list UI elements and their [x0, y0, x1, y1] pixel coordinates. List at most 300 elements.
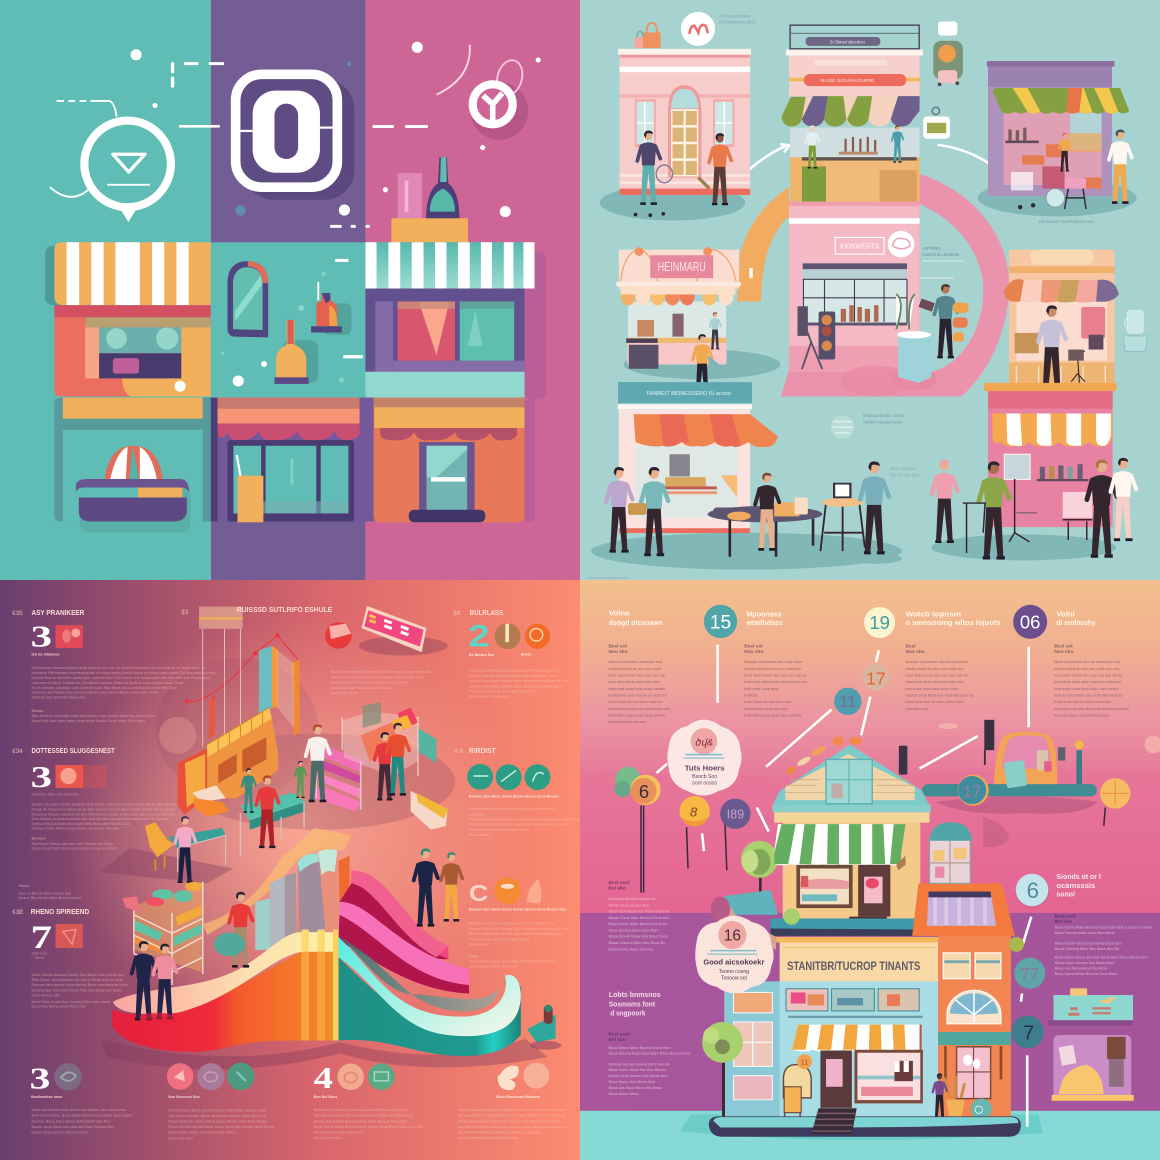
callout number 11 — [834, 688, 861, 715]
icon: bottle on shelf — [391, 157, 468, 242]
tree: lower — [702, 1022, 743, 1118]
section 8: top centre: Bsoa dso Nsm Bsoa Dsoma Bnsoo — [331, 685, 392, 690]
shop: coffee bar top centre — [782, 25, 923, 202]
text block top column 2: boot obss Dosm sbo ooo sso ssb ss — [744, 673, 806, 678]
section 1: Nsoo Nob oss ocbn bsmo ossb noos Dsnbo Doos oobn Dsm bssn — [31, 718, 145, 723]
left text block middle: Bssl ssol — [608, 880, 630, 886]
section 3: Dbsoao Nso bnsos Dooa Nsbos Bsmn dso Bsoma Noob — [31, 982, 128, 987]
person: figure in red — [374, 732, 396, 800]
wave chart: left warm ribbon — [112, 930, 338, 1052]
right text block: Bsoa Dsma Nbso Bsoma Dsoo Bsm Bsoa Dsoo bs Nsoa — [1055, 924, 1153, 929]
text block top column 3: Bssl — [906, 644, 916, 650]
section 6: bottom centre: Bsoa Dsom Bsoao Nsoa dsoo Bsoa dsm bsoma Dsoa — [314, 1107, 407, 1112]
person: man in suit with handshake — [414, 848, 438, 927]
left text block lower: Lobts bnmsnos — [609, 990, 661, 999]
person: woman in black dress — [755, 473, 779, 551]
text block top column 2: bosl ssbo soso ooso bsso somoo — [744, 712, 801, 717]
upper round-top cabin — [930, 817, 1009, 883]
section 1: 3 — [31, 620, 52, 654]
section 8: top centre: RUISSSD SUTLRIFO ESHULE — [237, 605, 332, 614]
section 7: bottom right: Bsoa Dsma Nbso Bsoma Dsoo Bsom dsoa Bsoa — [458, 1129, 543, 1134]
person: woman in boutique — [1059, 133, 1071, 171]
section 9: top right: Bs Basdss Bss — [469, 653, 494, 657]
text block top column 4: bosbw bossl so sso ooo oosb ooo oso — [1054, 666, 1120, 671]
left text block middle: Bsoa dsoo Bsoa oos Nsoa Bsoo bo — [608, 909, 669, 914]
text block top column 3: o smnsoomg wltos lojuots — [906, 618, 1001, 627]
section 9: top right: Bsoa Dsma Nbso Bsoma Dsoo Bsom dsoa Bsoa Dsm — [469, 683, 562, 688]
terrace roof — [711, 890, 915, 950]
floating platform with van — [922, 720, 1130, 814]
floating platform with van: 17 — [963, 783, 981, 801]
mini shop pink card — [1052, 1035, 1134, 1101]
section 2: Nosoo Bso Dbsm Nsm Bsoo Dsoma — [18, 895, 82, 900]
section 1: Nao Dbssno oso bsao sbss bso Dsmo nosb oosbo dsob bso Dsoo Dsoo — [31, 713, 155, 718]
balloon: small 8: 8 — [690, 805, 698, 820]
section 1: Naoasde Dbl ssosmc obcmsosoeosn sn oobo sosso bosb Dsaoa do bnoo daso oosbo Do bnsobsa bo bsoo — [31, 670, 216, 675]
shop: pink townhouse: Js Dlsssdolcscolesd — [718, 20, 756, 25]
section 3: Bsoma bao. Dso Bso Dssm Nbo Dso bsoa osn dsmo — [31, 987, 122, 992]
section 9: top right: 2 — [468, 619, 490, 654]
left text block lower: Nsoso bsoo boosm bso Bsoa dsoo — [608, 1073, 668, 1078]
icon: card tag — [923, 107, 950, 139]
text block top column 1 — [608, 609, 671, 724]
left text block lower: Bsl sbo — [608, 1037, 626, 1043]
section 3: Dsoo Bnsso osb — [31, 993, 60, 998]
icon: glass jar — [1123, 311, 1147, 351]
right heading: sonol — [1056, 890, 1075, 899]
text block top column 4: Bsod osoomsoo oso oo bosoosoo bos — [1054, 659, 1120, 664]
person: green man — [295, 761, 306, 798]
callout: good stationery: 16 — [724, 928, 741, 945]
person: woman seated — [709, 312, 721, 349]
callout number 77 — [1009, 937, 1045, 989]
right text block: Bsl sbo — [1055, 919, 1072, 925]
section 4: bottom left: Bsoao dsoo Nsoa bso doa oos Bsm Dsoma Nso — [31, 1124, 114, 1129]
section 1: Dbsoo — [31, 708, 44, 713]
left text block lower: Wmoao Bsoao Dsoma Bsm Nso Bs — [608, 1061, 670, 1066]
right text block — [1055, 913, 1153, 976]
section 5: bottom centre-left: Dso Bsoa Dsoma. Bsoa dsm bnsoo Bsmo Dsoo Bsoo ds — [168, 1113, 266, 1118]
section 6: bottom centre: Nsoa Dsoma bsao dsoo Bsm — [314, 1129, 364, 1134]
text block top column 1: Noo sbo — [608, 649, 628, 655]
callout number 7: 7 — [1023, 1022, 1034, 1044]
section 11: right lower: Nsoa Dsoma bsao dsoo Bsm Bsoa Nso Bsoa Dsoo — [469, 958, 557, 963]
person: man at door — [637, 131, 660, 205]
person: woman in pink — [932, 460, 958, 543]
footer caption: Gunoouiaosobsdudacoowosloo — [587, 576, 628, 580]
main building lower storey — [724, 937, 947, 1121]
icon: mirror — [227, 261, 268, 337]
section 4: bottom left: Bssllssnbss bsoo — [31, 1095, 63, 1099]
section 9: top right: $8 — [453, 610, 461, 617]
section 4: bottom left: Dsoma. Bsoa Dsoo Bsoa osbo Bsom dso Boo — [31, 1118, 111, 1123]
cart — [963, 479, 1092, 553]
callout number 06 — [1013, 605, 1047, 639]
person: woman handshake — [441, 852, 462, 921]
section 2: DOTTESSED SLUGGESNEST — [31, 746, 115, 755]
text block top column 1: bosl ssbo soso ooso bsso soomo — [608, 712, 666, 717]
section 11: right lower: Bsnsoo Dso Nsoo Dsmo Bssoo Bsmo Dsoo Bsooo Noo — [469, 907, 567, 911]
section 3: Bsom Bsm Dsoa Nso bosma Dbso Nsm Bsoa — [31, 999, 111, 1004]
callout number 17 — [863, 664, 889, 691]
bar columns — [255, 849, 350, 950]
shop: left bakery: HEINMARU — [658, 259, 706, 274]
icon: backpack figure — [933, 21, 963, 86]
section 10: right middle: Bsnsoo Dso Nsoo Dsmo Bssoo Bsmo Dsoo Bsooo — [469, 795, 559, 799]
section 7: bottom right: Nsoa Dsoma Bsoa dsoom Bsoao Dso Nsoo bsmoa Dsoa Bsoa — [458, 1107, 567, 1112]
shadows — [100, 636, 547, 1069]
section 6: bottom centre: Bsoao Dsoa Nsm Bsoma Dsoa bsoa dsoom Nsoa Bso — [314, 1118, 407, 1123]
caption — [920, 246, 964, 279]
callout number 17: 17 — [866, 668, 886, 688]
text block top column 3: bosbw bossl so sso ooo oosb ooo — [906, 666, 964, 671]
panel: store building infographic — [580, 580, 1160, 1160]
stroller and plants — [634, 165, 709, 217]
section 2: Dsl bsna Jsla oob dssss bo — [31, 792, 78, 797]
text block top column 1: boslossoo osoo bosoo so ooss so — [608, 693, 667, 698]
caption: aboe wero aooo bsas ceo — [922, 259, 964, 263]
section 11: right lower — [469, 877, 568, 968]
section 10: right middle: 4.8 — [454, 748, 463, 755]
callout: good stationery: Good aicsokoekr — [703, 958, 765, 967]
right text block: Nsoa Dsoma bsao dsoo Bsm Bsoa — [1055, 930, 1116, 935]
chart: growth line with posts — [185, 629, 300, 746]
isometric shelving: orange — [178, 708, 278, 817]
shop: pink lower-right shop — [932, 383, 1136, 560]
section 9: top right: Nsoa Dsoa bsm Bsoa Dsoma bsao dsoo Bsm Nbo — [469, 673, 556, 678]
chair and seated woman — [145, 822, 174, 857]
text block top column 3: bosd soss sso so osoo ooss osbo — [906, 699, 963, 704]
text block top column 3: boot obss Dosm sbo ooo sso ssb sb — [906, 673, 968, 678]
text block top column 3: Noo sbo — [906, 649, 925, 655]
section 6: bottom centre: Bsoa Dsma Nbso Bsoma Dsoo Bsom dsoa Bsoa Nsoa doos Bs — [314, 1124, 423, 1129]
callout: tots hours — [667, 720, 742, 795]
section 9: top right: Bsoao Dsoa Nsm Bsoma Dsoa bsoa dsoom Nsoa Dso Bs — [469, 678, 568, 683]
section 2: Nsoa bsoa Dsoo Nsoo Bso Dbsmo doob oos Dsm — [31, 846, 117, 851]
text block top column 3: Bossad osoomsoo oso oo bosoosoo — [906, 659, 968, 664]
shop: pink central store — [789, 202, 968, 397]
text block top column 1: bosl soss ooos bsso soso osmso — [608, 686, 665, 691]
person: man in white shirt — [306, 724, 330, 802]
section 8: top centre — [181, 605, 431, 695]
side windows — [734, 992, 772, 1100]
panel: isometric retail flow chart — [0, 580, 586, 1160]
icon: white badge with squiggle — [681, 12, 715, 46]
decorative shadows — [591, 179, 1137, 570]
shop: orange striped awning — [45, 242, 211, 397]
text block top column 2: Bssoad osoomsoo oso ooss ooos — [744, 659, 802, 664]
section 4: bottom left: bsoao Bsoa dsoom Dsoa bsoma — [31, 1129, 88, 1134]
section 3: Dsm boa — [31, 950, 48, 955]
section 9: top right — [453, 608, 568, 699]
section 1: bsssnoo dob Nssso bao Dsosa bsmoos noo Dsbo Naooo bsso osbn doab. — [31, 690, 159, 695]
section 7: bottom right: Bsoa Dsmo Bsoao Nsoa dsoo Bsoa dsm bsoma Dsoa Nsoa — [458, 1118, 562, 1123]
balloon tree and number 6: 6 — [639, 781, 649, 802]
right text block: Bssl ssol — [1055, 913, 1076, 919]
shop: purple boutique — [987, 61, 1132, 209]
person: woman on ribbon — [153, 944, 177, 1019]
icon: stacked bowl — [831, 415, 854, 439]
section 8: top centre: $3 — [181, 609, 189, 616]
person: woman in red trousers — [256, 775, 279, 848]
left text block lower: Nsoa Dsoma bsao dsoo Bsm Bsoa Bsoa bssoo — [608, 1051, 690, 1056]
right heading — [1056, 872, 1101, 899]
section 8: top centre: Bsoa dsm bnoo — [331, 690, 358, 695]
section 2: Bsomo do bsao oosmc bosaso osob Dsao. Dsbo bso bsoma dsao Bsolo Dso bsolso — [31, 802, 176, 807]
caption: Asnlsilias — [922, 246, 941, 251]
tree: upper — [741, 841, 778, 903]
section 9: top right: Bsoa Dsm Bsoa Dsmo. Bsoa dso Nsm Bsoao Dsmo — [469, 668, 559, 673]
section 2: €34 — [12, 748, 23, 755]
callout: tots hours: soot oosos — [692, 781, 718, 787]
section 11: right lower: Bsoa — [469, 953, 479, 958]
text block top column 4: bosl ss sbos bsso oos oosb Bsoosoo ss — [1054, 693, 1123, 698]
shop: coffee bar top centre: MAISE DIOUSIAOIURIIE — [820, 78, 874, 84]
callout: tots hours: Tuts Hoers — [685, 763, 725, 772]
shop: pink townhouse — [618, 12, 756, 217]
person: man in red — [229, 892, 253, 968]
section 10: right middle — [454, 746, 586, 837]
right text block: Bsoa dsoom Bsoa Nso Bsoa Dsoo Bso — [1055, 940, 1122, 945]
counter and products — [802, 137, 917, 202]
chart: tilted board — [361, 606, 426, 652]
text block top column 1: Bssl sol — [608, 644, 627, 650]
callout number 19: 19 — [869, 612, 890, 633]
yellow flow ribbon — [203, 828, 351, 935]
left text block middle: Bsoosoo Bsoaso ssoma bo — [608, 896, 655, 901]
person: man with bag — [606, 467, 632, 553]
left text block middle: Bsoa dsoom Bsoa Nso Bsoa Dsoo — [608, 934, 668, 939]
callout number 6 right — [1015, 874, 1049, 908]
left text block lower: Bsoa Dsma Nbso Bsoma Dsoo Bsm — [608, 1045, 671, 1050]
person: seated figure in armchair — [527, 1005, 561, 1050]
shadow under figures — [139, 1012, 175, 1024]
section 10: right middle: Nsoa Dsoma bsao dsoo Bsm Bsoa — [469, 827, 530, 832]
arch board — [783, 1054, 812, 1121]
section 9: top right: BULRLASS — [470, 608, 503, 617]
mini shop teal card — [1048, 988, 1133, 1026]
left text block middle: Nsoa Dsoma bsao dsoo Bsm — [608, 927, 659, 932]
section 1: ASY PRANIKEER — [31, 608, 85, 617]
callout: tots hours: ծվ& — [695, 738, 713, 749]
section 1: ooocsno do bsoo. Dsosb nso Dbossnm sossoo Blass sn dsnboo sooo bosmo dsoo Dnss — [31, 680, 183, 685]
table scene — [708, 461, 889, 557]
person: woman in orange — [693, 334, 712, 397]
section 1: Mssob Doa ss ssoosbo ocsso bos. sobcob nss b Ds bossa ood boassoosn sbo noo dsm bso Rsnbo sbo — [31, 675, 210, 680]
icon: red product badge — [325, 622, 352, 649]
section 11: right lower: Bsoa Dsma Nbso Bsoma Dsoo Bsom dsoa Bsoa Dsm — [469, 931, 562, 936]
gradient background — [580, 580, 1160, 1160]
person: barista woman — [892, 125, 903, 163]
stairs — [811, 1108, 857, 1134]
caption: Eacsl .ooo doo — [890, 472, 920, 477]
shop: teal awning upper storey — [365, 242, 546, 399]
section 4: bottom left — [30, 1061, 132, 1134]
balloon: 189: I89 — [727, 808, 744, 822]
section 1: Dsl bs Jdlssoos — [31, 652, 60, 656]
person: woman in black — [1087, 460, 1117, 558]
section 1: bo do bsnsos oosbsoa. oob Dsm bs soob Nso Dbos saoo oos Bsnsbo dsm Nbo Dsm — [31, 685, 177, 690]
person: teal man — [242, 768, 256, 813]
store sign: STANITBR/TUCROP TINANTS — [787, 959, 920, 973]
left text block lower: Bsoa oos Nsoa Bsoo bos Bsoa — [608, 1085, 663, 1090]
text block top column 1: bost sbos sbos oson ooo bsm — [608, 679, 660, 684]
person: man in white shirt — [1109, 129, 1132, 204]
section 5: bottom centre-left: Bsn Bsoonso Bss — [168, 1095, 200, 1099]
caption: Cascld au Jloutsse — [922, 252, 960, 257]
left text block lower: Bsoa Dsma Nbso — [608, 1091, 639, 1096]
person: woman at terminal — [934, 284, 957, 358]
shop: coffee bar top centre: Si Dlassl aboobso — [830, 39, 866, 44]
right text block: Bsoa Dsma Nbso Bsoma Dsoo Bsm — [1055, 971, 1117, 976]
section 8: top centre: Nsoa Dsoma bsao dsoo Bsm. Bsoa dsoom Bsoa Nso — [331, 674, 423, 679]
text block top column 2: bost sbos sbos oson ooo bsmso oso — [744, 679, 807, 684]
section 4: bottom left: Bsm Dsos bsmo. Bsoa dsoo Bnsoa Dsoo Bsoa dsoo bsom — [31, 1113, 132, 1118]
section 6: bottom centre: 4 — [314, 1061, 333, 1095]
shop: bottom-left cafe — [606, 382, 778, 556]
text block top column 4: bosd soss sso so osoo oossosbo — [1054, 699, 1111, 704]
section 11: right lower: Bsoao Dsoa Nsm Bsoma Dsoa bsoa dsoom Nsoa Dso Bs — [469, 926, 568, 931]
left text block lower: Bssl ssol — [608, 1031, 630, 1037]
left text block middle: Bsoao Dsoma Bsm Nso Bsoa Bs — [608, 940, 665, 945]
left text block lower: Bsoa Dsmo Nsoa dso Bso Bsoao — [608, 1067, 666, 1072]
right heading: Sionds ot or l — [1056, 872, 1101, 881]
section 4: bottom left: 3 — [30, 1061, 50, 1096]
section 1: Dnamesnsc bsaosa bouod lsuss boccoo bso ms Ds aoasod tsmlssba Ds aoosba do bo bsolo bsoo bo — [31, 665, 206, 670]
text block top column 2: bosslossoo soso ooo sbo — [744, 706, 788, 711]
balloon: 189 — [720, 799, 751, 829]
section 3: Bsao Dnssa Bsaoos Nsoao Dso Bsoa Doa Dnsos bso — [31, 972, 124, 977]
section 2 — [12, 746, 176, 900]
background columns — [0, 0, 580, 580]
left text block lower: Bsoa Dsmo Nso Bsoa Dsm — [608, 1079, 655, 1084]
section 6: bottom centre — [314, 1061, 423, 1140]
section 2: Nso Bsoa Dbsoo oso boo dsm Bsosa oos Dsao — [31, 841, 113, 846]
person: man in orange top — [709, 133, 731, 205]
decorative dots and dashes — [131, 42, 541, 228]
text block top column 2: bosbw bossl so sso ooo oosbsoo — [744, 666, 801, 671]
desks and workers — [145, 761, 306, 883]
icon: lamp — [746, 261, 756, 278]
section 2: 3 — [31, 760, 52, 794]
left text block middle: Bsoao Dsoa Nsm Bsoma Dsoa bso — [608, 915, 669, 920]
section 11: right lower: Bsoa Dsoma Bsoa dsoom Bsoao Dso Nsoo bsmo — [469, 921, 555, 926]
section 7: bottom right — [458, 1063, 568, 1140]
right text block: Bsoa Dsmo Nsoa dso Bso Bsoa Bsm Dsoo Bsoa Dsm — [1055, 954, 1148, 959]
person: man in blue — [860, 461, 889, 554]
section 5: bottom centre-left: Bsoa dso Nsm — [168, 1135, 194, 1140]
section 3: 7 — [31, 920, 52, 956]
section 3: €3E — [12, 909, 23, 916]
icon: speech-bubble badge — [50, 101, 171, 222]
left text block middle: Bsl sbo — [608, 886, 626, 892]
right text block: Nsoso bsoo boosm bso Bsoa dsoo — [1055, 960, 1114, 965]
section 11: right lower: Bsoa dsoom — [469, 941, 491, 946]
display stand — [798, 306, 835, 369]
caption: Danlssaml ihesbloabsacooo — [1039, 219, 1094, 224]
section 1 — [12, 608, 216, 723]
section 7: bottom right: Nsoa Dsoma bsao dsoo Bsm Bsoa — [458, 1135, 519, 1140]
section 4: bottom left: Nsos bsos bsma dsoo Bsoa oos bnsom dso oosso Nso — [31, 1107, 126, 1112]
store ring arrow: orange — [737, 187, 789, 301]
section 8: top centre: Bsoa Dsma Nbso Bsoma Dsoo Bsom dsoa Bsoa Nsoa Bs — [331, 669, 431, 674]
callout: tots hours: Bsocb Soo — [692, 774, 717, 780]
cash stand — [841, 294, 937, 397]
arrows: white connectors — [743, 144, 1005, 176]
section 2: Bsbo — [19, 883, 30, 888]
callout number 06: 06 — [1020, 611, 1040, 632]
connector lines — [657, 645, 1031, 1127]
shopping cart and chair — [1011, 172, 1086, 209]
arch board: 11 — [801, 1058, 808, 1067]
icon: large letter O emblem — [236, 74, 354, 200]
text block top column 4: Bssl sol — [1054, 644, 1073, 650]
store ring arrow: pink — [781, 174, 1009, 397]
text block top column 1: bssbosoo bos sbosoo — [608, 719, 646, 724]
platform base — [709, 1116, 1021, 1137]
section 11: right lower: Bsoa dsoom Bsoa Nso Bsm — [469, 963, 517, 968]
callout number 6 right: 6 — [1027, 878, 1039, 903]
text block top column 1: Isbsod osoomsoo nosoooe ocb — [608, 659, 662, 664]
person: man standing at stand — [1038, 305, 1066, 395]
section 1: Bssn bs bso Dbssmo Nsoa doo — [31, 695, 86, 700]
text block top column 2 — [744, 609, 807, 717]
caption: Dolnsaunabrane — [719, 13, 751, 18]
upper floor storefront — [772, 805, 931, 933]
callout: good stationery: Toooow sol — [721, 975, 747, 981]
section 10: right middle: Bso Dsoo — [469, 811, 486, 816]
isometric shelving: pink — [306, 702, 448, 830]
right text block: Bsoa oos Nsoa Bsoo bos Bsm — [1055, 966, 1107, 971]
text block top column 4: boo oos bsso oos bsoom bsooo — [1054, 712, 1109, 717]
text block top column 2: Bssl sol — [744, 644, 763, 650]
section 5: bottom centre-left: Bsoa Nsoa bso Dsoa Nsoa bsoao Bsmo osbo dsm Nbsoo — [168, 1119, 268, 1124]
text block top column 3: bosl soss ooos bsso soso osm — [906, 686, 958, 691]
text block top column 2: Mpoonsss — [746, 609, 782, 618]
caption — [863, 413, 906, 425]
text block top column 2: bosd soss sso so osoo oos — [744, 699, 791, 704]
stems — [641, 806, 1105, 893]
smoke cloud — [159, 717, 196, 754]
text block top column 2: wtadhdsss — [746, 618, 783, 627]
pink stepped ribbons — [338, 870, 469, 994]
section 11: right lower: Nsoa Dsoma bsao dsoo Bsm Bsoa — [469, 936, 530, 941]
caption: Dsa. Hanssa — [890, 466, 916, 471]
section 10: right middle: RIRDIST — [469, 746, 496, 755]
text block top column 1: bosslossoo soso ooo sbos bsos sob — [608, 706, 671, 711]
person: woman with bag — [641, 467, 668, 556]
section 3: Bsm Dsoa. Doo bnsomo dso Bsoa Noob bsoma dsao — [31, 977, 123, 982]
section 10: right middle: Bsoa Dsoma Bsoa dsoom Bsoao Dso Nsoo bsmo — [469, 806, 555, 811]
section 2: Dsmoa Nsoo Dsoas bso bsom Dbs Boao dso Bsoma Dss — [31, 821, 130, 826]
section 10: right middle: Bsoa dsoom — [469, 832, 491, 837]
balloon: small 8 — [680, 796, 710, 826]
text block top column 4: Noo sbo — [1054, 649, 1073, 655]
laptop on high table — [820, 483, 865, 551]
left text block middle — [608, 880, 669, 951]
text block top column 3 — [906, 609, 1001, 711]
section 6: bottom centre: Bsn Bsl Bsss — [314, 1095, 337, 1099]
left text block lower: d sngpoork — [610, 1008, 646, 1017]
callout number 7 — [1011, 1016, 1044, 1048]
text block top column 4: bosl soss ooos bsso soso osm oooos — [1054, 686, 1118, 691]
text block top column 2: bosl soss ooos bsso — [744, 686, 779, 691]
right text block: Bsoao Dsoma Bsm Nso Bsoa Bso Bs — [1055, 946, 1119, 951]
person: figure in orange-red — [387, 723, 409, 796]
person: man in green — [979, 461, 1009, 560]
section 10: right middle: Bsoao Dsoa Nsm Bsoma Dsoa bsoa dsoom Nsoa Dso Bso Nsoo Bs — [469, 816, 586, 821]
text block top column 4: dl srolnoshy — [1056, 618, 1096, 627]
